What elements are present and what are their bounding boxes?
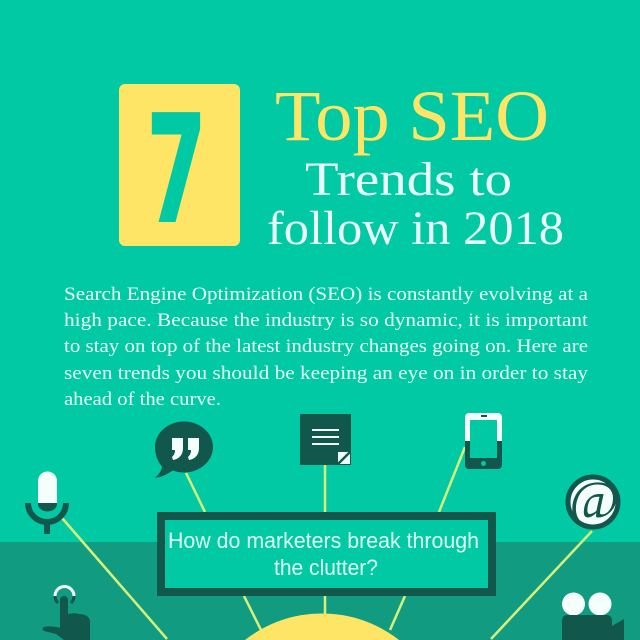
icon: smartphone (465, 413, 502, 469)
intro paragraph: ahead of the curve. (64, 390, 221, 410)
icon: speech bubble with quotes (155, 422, 213, 478)
title: Top SEO (275, 76, 549, 156)
connector lines (62, 447, 592, 639)
icon: microphone (28, 472, 66, 534)
intro paragraph: seven trends you should be keeping an eye on in order to stay (64, 364, 589, 384)
icon: tap gesture hand (42, 586, 90, 640)
intro paragraph: Search Engine Optimization (SEO) is constantly evolving at a (64, 285, 588, 305)
badge: number 7: 7 (147, 84, 206, 256)
intro paragraph (64, 285, 589, 410)
badge: number 7 (119, 84, 240, 256)
sun semicircle (245, 613, 399, 640)
title: Trends to (305, 153, 512, 206)
question box: How do marketers break through (168, 528, 479, 553)
question box: the clutter? (274, 555, 378, 580)
intro paragraph: to stay on top of the latest industry changes going on. Here are (64, 337, 588, 357)
title: follow in 2018 (267, 202, 564, 255)
title (267, 76, 564, 255)
icon: document (300, 414, 351, 465)
icon: at sign: @ (569, 470, 619, 530)
question box (161, 516, 492, 592)
icon: video camera (562, 592, 624, 640)
intro paragraph: high pace. Because the industry is so dynamic, it is important (64, 311, 589, 331)
